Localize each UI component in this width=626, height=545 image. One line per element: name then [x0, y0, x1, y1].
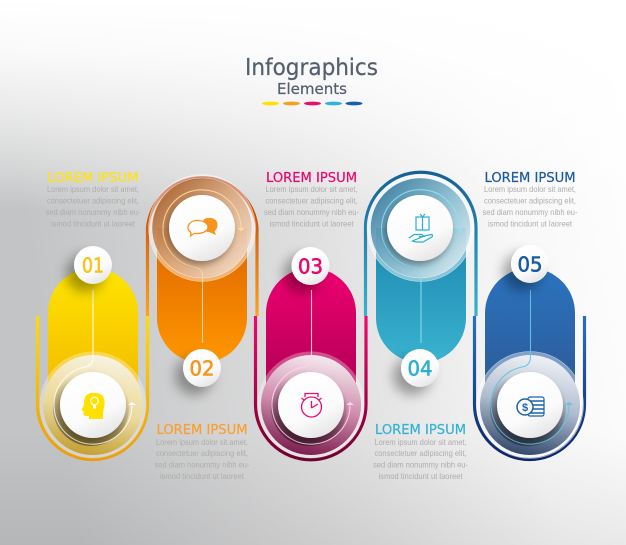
title: Infographics [245, 55, 378, 81]
step 1 text: sed diam nonummy nibh eu- [46, 207, 141, 217]
step 2 number badge: 02 [190, 356, 214, 380]
step 5 glass ring [476, 290, 584, 458]
step 4 text: sed diam nonummy nibh eu- [373, 460, 468, 470]
title: Elements [277, 80, 347, 98]
step 3 white disc [278, 372, 344, 438]
step 5 text: sed diam nonummy nibh eu- [482, 207, 578, 217]
step 5 pill [485, 268, 575, 405]
icon: coins [517, 397, 544, 416]
step 2 text: LOREM IPSUM [156, 423, 248, 438]
step 5 white disc [497, 372, 563, 438]
step 3 text [264, 171, 359, 228]
step 5 [474, 171, 584, 460]
step 2 text: Lorem ipsum dolor sit amet, [156, 437, 248, 447]
step 2 [148, 174, 257, 481]
step 3 number badge: 03 [298, 254, 323, 278]
step 3 pill [266, 268, 356, 405]
step 4 number badge: 04 [408, 356, 432, 380]
step 1 white disc [60, 372, 126, 438]
step 4 number badge [401, 349, 439, 387]
step 1 number badge: 01 [82, 254, 104, 278]
step 5 outer line [474, 316, 584, 460]
step 2 white disc [169, 195, 235, 261]
icon: speech bubbles [188, 218, 218, 236]
step 2 text: consectetuer adipiscing elit, [156, 448, 248, 458]
step 4 white disc [387, 195, 453, 261]
step 3 glass ring [258, 290, 364, 458]
step 4 text: Lorem ipsum dolor sit amet, [374, 437, 466, 447]
step 3 text: Lorem ipsum dolor sit amet, [266, 184, 358, 194]
step 1 text: Lorem ipsum dolor sit amet, [47, 184, 139, 194]
step 3 text: LOREM IPSUM [266, 171, 357, 186]
step 5 number badge [511, 245, 549, 283]
step 1 text: ismod tincidunt ut laoreet [51, 218, 136, 228]
step 2 text [154, 423, 250, 481]
step 5 text [482, 171, 578, 228]
step 2 number badge [183, 349, 221, 387]
step 3 text: sed diam nonummy nibh eu- [264, 207, 359, 217]
step 4 text: consectetuer adipiscing elit, [374, 448, 466, 458]
step 2 outer line [148, 178, 257, 316]
title colour dashes [262, 102, 362, 105]
icon: hand holding gift [409, 214, 432, 242]
step 4 text: ismod tincidunt ut laoreet [378, 471, 463, 481]
step 1 pill [48, 268, 138, 405]
step 4 pill [376, 228, 466, 363]
step 1 glass ring [40, 290, 146, 458]
step 5 text: Lorem ipsum dolor sit amet, [484, 184, 576, 194]
icon: coins: $ [522, 402, 528, 414]
step 1 number badge [74, 246, 112, 284]
step 2 pill [157, 228, 247, 363]
step 1 [38, 171, 148, 459]
step 3 number badge [292, 247, 330, 285]
step 5 text: LOREM IPSUM [484, 171, 576, 186]
step 1 text: consectetuer adipiscing elit, [47, 196, 139, 206]
icon: stopwatch [302, 394, 322, 417]
title [245, 55, 378, 98]
icon: head with light bulb [82, 393, 104, 419]
step 5 text: ismod tincidunt ut laoreet [488, 218, 573, 228]
step 2 text: sed diam nonummy nibh eu- [154, 460, 250, 470]
step 3 outer line [256, 316, 366, 460]
step 1 outer line [38, 316, 148, 459]
step 1 text [46, 171, 141, 228]
step 2 glass ring [148, 174, 256, 343]
step 4 text [373, 423, 468, 481]
step 4 text: LOREM IPSUM [375, 423, 466, 438]
step 2 text: ismod tincidunt ut laoreet [160, 471, 245, 481]
step 1 text: LOREM IPSUM [48, 171, 138, 186]
step 3 text: consectetuer adipiscing elit, [266, 196, 358, 206]
step 5 text: consectetuer adipiscing elit, [484, 196, 576, 206]
step 4 outer line [366, 172, 476, 316]
step 3 text: ismod tincidunt ut laoreet [270, 218, 354, 228]
step 4 [366, 172, 476, 481]
step 5 number badge: 05 [518, 252, 542, 276]
step 4 glass ring [367, 174, 474, 343]
step 3 [256, 171, 366, 460]
